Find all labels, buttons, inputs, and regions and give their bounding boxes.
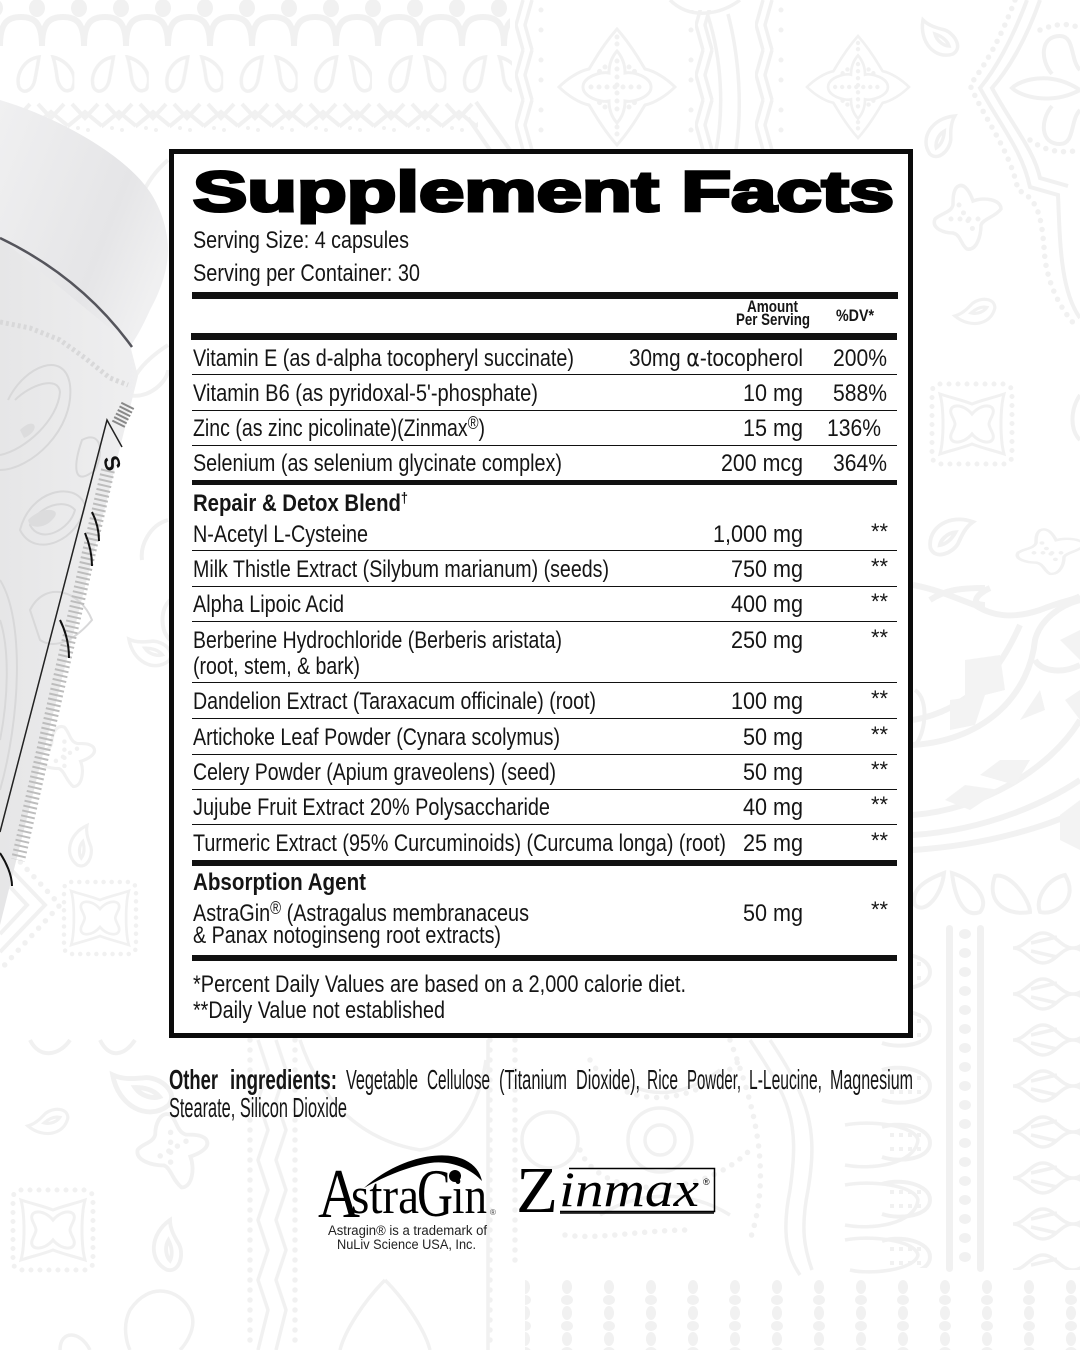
other ingredients: Magnesium (830, 1064, 913, 1095)
repair and detox blend rows: Celery Powder (Apium graveolens) (seed) (193, 759, 556, 786)
logo: Zinmax: Z (516, 1154, 558, 1227)
repair and detox blend rows: 250 mg (731, 627, 803, 654)
repair and detox blend rows: (root, stem, & bark) (193, 653, 360, 680)
absorption agent rows: 50 mg (743, 900, 803, 927)
right bars and lattice (946, 925, 953, 1272)
repair and detox blend rows: 50 mg (743, 724, 803, 751)
repair and detox blend rows: Dandelion Extract (Taraxacum officinale) (root) (193, 688, 596, 715)
repair and detox blend rows: N-Acetyl L-Cysteine (193, 521, 368, 548)
repair and detox blend rows: 40 mg (743, 794, 803, 821)
other ingredients: (Titanium (499, 1064, 567, 1095)
vitamins and minerals rows: 30mg α-tocopherol (629, 344, 803, 372)
repair and detox blend rows: Turmeric Extract (95% Curcuminoids) (Curcuma longa) (root) (193, 830, 726, 857)
logo: AstraGin: stra (351, 1168, 419, 1225)
repair and detox blend rows (193, 490, 888, 857)
repair and detox blend rows: ** (871, 519, 888, 544)
other ingredients: Powder, (687, 1064, 741, 1095)
vitamins and minerals rows: Zinc (as zinc picolinate)(Zinmax (193, 415, 530, 442)
other ingredients: Stearate, Silicon Dioxide (169, 1092, 347, 1123)
logo: Zinmax: inmax (559, 1161, 699, 1217)
logo: AstraGin: A (318, 1156, 360, 1233)
rule lines (191, 292, 898, 961)
column headers: %DV* (836, 306, 874, 325)
absorption agent rows (193, 869, 888, 949)
other ingredients: Vegetable (346, 1064, 418, 1095)
absorption agent rows: & Panax notoginseng root extracts) (193, 922, 501, 949)
absorption agent rows: Absorption Agent (193, 869, 366, 896)
repair and detox blend rows: 25 mg (743, 830, 803, 857)
vitamins and minerals rows: 15 mg (743, 415, 803, 442)
bottle body (0, 238, 138, 925)
logo: AstraGin: Astragin® is a trademark of (328, 1223, 487, 1238)
other ingredients: Other (169, 1064, 218, 1095)
bottle lid (0, 100, 168, 352)
serving info: Serving Size: 4 capsules (193, 227, 409, 254)
title: Supplement Facts (193, 160, 894, 224)
logo: Zinmax (516, 1154, 714, 1227)
serving info: Serving per Container: 30 (193, 260, 420, 287)
vitamins and minerals rows: ® (468, 413, 478, 433)
repair and detox blend rows: Repair & Detox Blend (193, 490, 438, 517)
logo: AstraGin: NuLiv Science USA, Inc. (337, 1237, 476, 1252)
other ingredients: Dioxide), (576, 1064, 640, 1095)
vitamins and minerals rows: Vitamin E (as d-alpha tocopheryl succinate) (193, 345, 574, 372)
repair and detox blend rows: Alpha Lipoic Acid (193, 591, 344, 618)
left side (64, 882, 136, 954)
absorption agent rows: ** (871, 897, 888, 922)
repair and detox blend rows: 1,000 mg (713, 521, 803, 548)
repair and detox blend rows: Jujube Fruit Extract 20% Polysaccharide (193, 794, 550, 821)
vitamins and minerals rows: ) (478, 415, 485, 442)
repair and detox blend rows: ** (871, 828, 888, 853)
bottom (525, 1280, 1080, 1350)
other ingredients: ingredients: (230, 1064, 337, 1095)
logo: Zinmax: ® (703, 1177, 710, 1187)
repair and detox blend rows: Berberine Hydrochloride (Berberis aristata) (193, 627, 562, 654)
repair and detox blend rows: ** (871, 722, 888, 747)
bottle label edge (0, 405, 128, 886)
right paisley (928, 515, 973, 559)
logo: AstraGin: ® (490, 1208, 496, 1217)
bottle paisley embossing (0, 322, 128, 790)
repair and detox blend rows: † (401, 490, 408, 507)
repair and detox blend rows: Milk Thistle Extract (Silybum marianum) (seeds) (193, 556, 609, 583)
logo: AstraGin: in (452, 1168, 487, 1225)
other ingredients: Rice (647, 1064, 678, 1095)
vitamins and minerals rows: 364% (833, 450, 887, 477)
logo: AstraGin: G (417, 1155, 453, 1231)
repair and detox blend rows: ** (871, 554, 888, 579)
repair and detox blend rows: 100 mg (731, 688, 803, 715)
vitamins and minerals rows: 200% (833, 345, 887, 372)
vitamins and minerals rows: 10 mg (743, 380, 803, 407)
repair and detox blend rows: 50 mg (743, 759, 803, 786)
serving info (193, 227, 420, 287)
absorption agent rows: AstraGin (193, 900, 286, 927)
top right (922, 20, 958, 55)
repair and detox blend rows: 750 mg (731, 556, 803, 583)
absorption agent rows: ® (270, 898, 281, 918)
bottle label edge: S (98, 453, 126, 473)
supplement bottle (0, 100, 168, 925)
footnotes: *Percent Daily Values are based on a 2,000 calorie diet. (193, 971, 686, 998)
repair and detox blend rows: ** (871, 757, 888, 782)
other ingredients (169, 1064, 913, 1123)
absorption agent rows: (Astragalus membranaceus (281, 900, 529, 927)
other ingredients: L-Leucine, (749, 1064, 822, 1095)
footnotes (193, 971, 686, 1024)
vitamins and minerals rows: Selenium (as selenium glycinate complex) (193, 450, 562, 477)
vitamins and minerals rows: 136% (827, 415, 881, 442)
column headers: Per Serving (736, 310, 810, 329)
logo: AstraGin (318, 1155, 496, 1252)
repair and detox blend rows: 400 mg (731, 591, 803, 618)
other ingredients: Cellulose (427, 1064, 490, 1095)
footnotes: **Daily Value not established (193, 997, 445, 1024)
repair and detox blend rows: ** (871, 625, 888, 650)
vitamins and minerals rows: 200 mcg (721, 450, 803, 477)
vitamins and minerals rows (193, 344, 887, 477)
column headers (736, 297, 874, 329)
vitamins and minerals rows: 588% (833, 380, 887, 407)
paisley row (914, 873, 1070, 913)
repair and detox blend rows: ** (871, 589, 888, 614)
repair and detox blend rows: ** (871, 792, 888, 817)
supplement facts panel (172, 152, 910, 1036)
vitamins and minerals rows: Vitamin B6 (as pyridoxal-5'-phosphate) (193, 380, 538, 407)
repair and detox blend rows: ** (871, 686, 888, 711)
column headers: Amount (747, 297, 798, 316)
repair and detox blend rows: Artichoke Leaf Powder (Cynara scolymus) (193, 724, 560, 751)
